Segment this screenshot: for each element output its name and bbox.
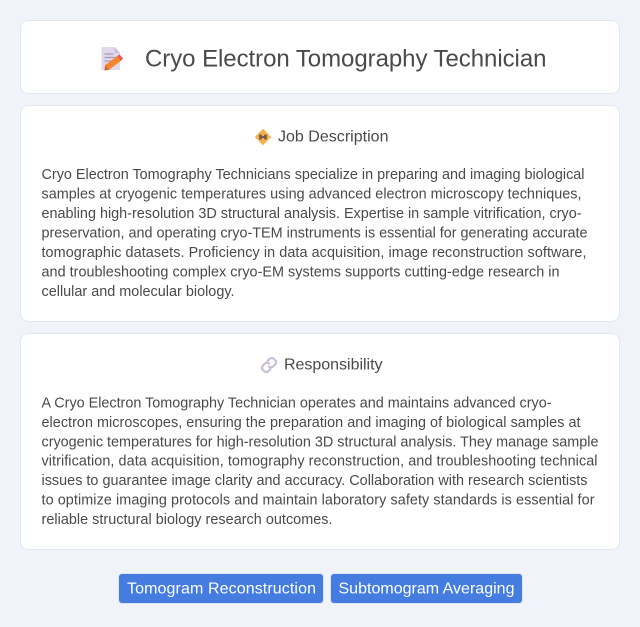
text block: job description body: tomographic datasets. Proficiency in data acquisition, image reconstruction software, [42,245,586,261]
panel: job description [20,105,620,322]
text block: job description body: and troubleshooting complex cryo-EM systems supports cutting-edge research in [42,264,560,280]
panel: title card [20,20,620,94]
icon: chain link [260,356,278,374]
text block: responsibility body: vitrification, data acquisition, tomography reconstruction, and troubleshooting technical [42,454,598,470]
text block: job description body: preservation, and operating cryo-TEM instruments is essential for generating accurate [42,226,588,242]
panel: responsibility [20,333,620,550]
title: Cryo Electron Tomography Technician [145,46,546,72]
text block: responsibility body: reliable structural biology research outcomes. [42,512,332,528]
heading: job description: Job Description [278,128,388,146]
text block: responsibility body: electron microscopes, ensuring the preparation and imaging of biological samples at [42,415,580,431]
tag: subtomogram averaging: Subtomogram Averaging [338,580,514,598]
text block: job description body: cellular and molecular biology. [42,284,234,300]
text block: responsibility body: A Cryo Electron Tomography Technician operates and maintains advanced cryo- [42,396,552,412]
text block: responsibility body: to optimize imaging protocols and maintain laboratory safety standards is essential for [42,492,595,508]
text block: responsibility body: issues to guarantee image clarity and accuracy. Collaboration with research scientists [42,473,588,489]
tag: tomogram reconstruction: Tomogram Reconstruction [127,580,316,598]
tag: tomogram reconstruction [119,574,323,603]
text block: job description body: samples at cryogenic temperatures using advanced electron microscopy techniques, [42,186,582,202]
text block: job description body: enabling high-resolution 3D structural analysis. Expertise in sample vitrification, cryo- [42,206,582,222]
heading: responsibility: Responsibility [284,356,382,374]
text block: responsibility body: cryogenic temperatures for high-resolution 3D structural analysis. They manage sample [42,434,598,450]
tag: subtomogram averaging [331,574,522,603]
text block: responsibility body [42,396,598,528]
icon: orange diamond [254,128,272,146]
text block: job description body: Cryo Electron Tomography Technicians specialize in preparing and imaging biological [42,167,584,183]
text block: job description body [42,167,588,300]
icon: document with pencil [102,47,123,70]
